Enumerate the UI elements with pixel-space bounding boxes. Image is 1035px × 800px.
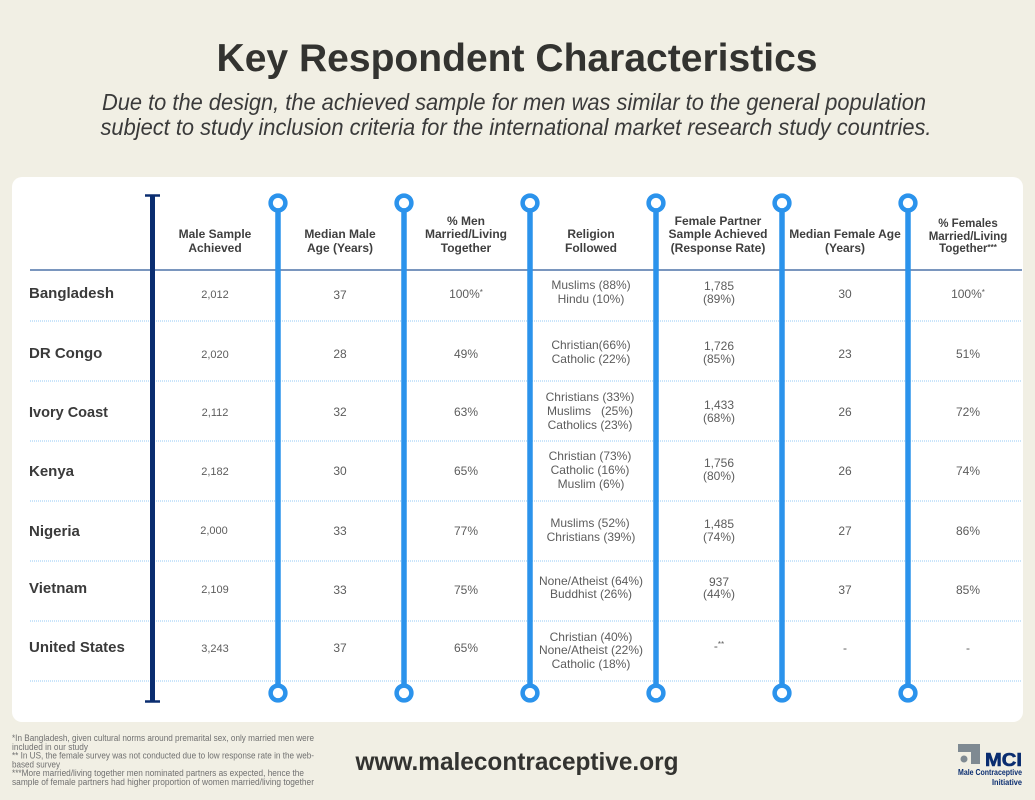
column headers: % Men: [447, 214, 485, 228]
row: Vietnam: 75%: [454, 583, 478, 597]
row: DR Congo: 2,020: [201, 349, 229, 361]
row: DR Congo: DR Congo: [29, 345, 102, 362]
row: United States: [29, 630, 970, 671]
row: Vietnam: 85%: [956, 583, 980, 597]
row: Kenya: 65%: [454, 464, 478, 478]
row: Bangladesh: 37: [333, 288, 347, 302]
row: Vietnam: [29, 574, 980, 601]
navy vertical divider: [145, 195, 160, 702]
title: Key Respondent Characteristics: [216, 37, 818, 80]
column headers: Female Partner: [675, 214, 762, 228]
column headers: Sample Achieved: [669, 227, 767, 241]
row: Ivory Coast: Catholics (23%): [548, 418, 632, 432]
footnotes: included in our study: [12, 742, 88, 752]
subtitle: subject to study inclusion criteria for the international market research study countries.: [100, 114, 932, 140]
row: Ivory Coast: [29, 390, 980, 432]
footnotes: sample of female partners had higher proportion of women married/living together: [12, 777, 314, 787]
row: Nigeria: [29, 516, 980, 544]
row: Ivory Coast: 72%: [956, 405, 980, 419]
website url: www.malecontraceptive.org: [355, 748, 678, 776]
row: Ivory Coast: Christians (33%): [546, 390, 634, 404]
row: Kenya: 30: [333, 464, 347, 478]
row: DR Congo: 49%: [454, 347, 478, 361]
row: United States: None/Atheist (22%): [539, 643, 643, 657]
row: United States: -: [843, 641, 847, 655]
row: Bangladesh: 30: [838, 287, 852, 301]
row: Kenya: (80%): [703, 469, 735, 483]
row: Ivory Coast: Muslims (25%): [547, 404, 633, 418]
icon: logo mark: [958, 744, 980, 764]
column headers: (Response Rate): [671, 241, 765, 255]
column headers: (Years): [825, 241, 865, 255]
row: Ivory Coast: (68%): [703, 411, 735, 425]
row: Nigeria: Muslims (52%): [550, 516, 630, 530]
row: DR Congo: 28: [333, 347, 347, 361]
column headers: Married/Living: [425, 227, 507, 241]
row: Kenya: [29, 449, 980, 491]
row: Kenya: Christian (73%): [549, 449, 631, 463]
row: Vietnam: None/Atheist (64%): [539, 574, 643, 588]
row: United States: United States: [29, 639, 125, 656]
column headers: Age (Years): [307, 241, 373, 255]
column headers: ***: [988, 243, 998, 252]
footnotes: ** In US, the female survey was not conducted due to low response rate in the web-: [12, 750, 314, 760]
row: Nigeria: Christians (39%): [547, 530, 635, 544]
row: Bangladesh: (89%): [703, 292, 735, 306]
row: United States: 3,243: [201, 643, 229, 655]
row: Nigeria: 77%: [454, 524, 478, 538]
row: DR Congo: 51%: [956, 347, 980, 361]
row: Bangladesh: [29, 278, 985, 306]
row: Vietnam: (44%): [703, 587, 735, 601]
row: Nigeria: 86%: [956, 524, 980, 538]
blue column dividers with circles: [271, 196, 915, 700]
row: DR Congo: Catholic (22%): [552, 352, 630, 366]
row: Ivory Coast: 1,433: [704, 398, 734, 412]
column headers: Achieved: [188, 241, 242, 255]
row: United States: 37: [333, 641, 347, 655]
row: Nigeria: Nigeria: [29, 523, 81, 540]
row: Vietnam: 33: [333, 583, 347, 597]
column headers: Religion: [567, 227, 615, 241]
row: Vietnam: Vietnam: [29, 580, 87, 597]
row: United States: -: [966, 641, 970, 655]
row: United States: Catholic (18%): [552, 657, 630, 671]
row: Kenya: 2,182: [201, 466, 229, 478]
row: United States: Christian (40%): [550, 630, 632, 644]
row: Ivory Coast: Ivory Coast: [29, 404, 108, 421]
logo: MCI: MCI: [985, 750, 1022, 770]
subtitle: [100, 89, 932, 140]
row: Nigeria: 33: [333, 524, 347, 538]
row: Bangladesh: 2,012: [201, 289, 229, 301]
row: Bangladesh: Bangladesh: [29, 285, 114, 302]
row: Nigeria: 27: [838, 524, 852, 538]
row: Kenya: 1,756: [704, 456, 734, 470]
logo: MCI: Male Contraceptive: [958, 768, 1022, 777]
logo: MCI: [958, 744, 1023, 787]
row: Vietnam: 37: [838, 583, 852, 597]
panel: table: [12, 177, 1023, 722]
row: Bangladesh: *: [480, 288, 483, 297]
row: Vietnam: 937: [709, 575, 729, 589]
column headers: Together: [939, 243, 988, 255]
row: United States: **: [718, 640, 724, 649]
column headers: Male Sample: [179, 227, 252, 241]
column headers: [179, 214, 1007, 255]
row: Bangladesh: *: [982, 288, 985, 297]
row: Nigeria: (74%): [703, 530, 735, 544]
logo: MCI: Initiative: [992, 778, 1023, 787]
row: Kenya: 74%: [956, 464, 980, 478]
row: DR Congo: Christian(66%): [551, 338, 631, 352]
column headers: Together: [441, 241, 492, 255]
row: Ivory Coast: 2,112: [202, 407, 228, 419]
row: DR Congo: (85%): [703, 352, 735, 366]
row: Kenya: 26: [838, 464, 852, 478]
row: Vietnam: 2,109: [201, 584, 229, 596]
footnotes: *In Bangladesh, given cultural norms around premarital sex, only married men were: [12, 733, 314, 743]
row: United States: -: [714, 639, 718, 653]
row: Kenya: Kenya: [29, 463, 75, 480]
row: Nigeria: 2,000: [200, 525, 228, 537]
subtitle: Due to the design, the achieved sample for men was similar to the general population: [102, 89, 926, 115]
footnotes: ***More married/living together men nominated partners as expected, hence the: [12, 768, 304, 778]
row: Bangladesh: 100%: [449, 287, 480, 301]
row: Ivory Coast: 32: [333, 405, 347, 419]
row: Ivory Coast: 63%: [454, 405, 478, 419]
row: Kenya: Muslim (6%): [558, 477, 624, 491]
column headers: % Females: [938, 218, 998, 230]
row: DR Congo: 23: [838, 347, 852, 361]
column headers: Median Male: [304, 227, 376, 241]
row: DR Congo: 1,726: [704, 339, 734, 353]
row: Bangladesh: 100%: [951, 287, 982, 301]
row divider lines: [30, 270, 1022, 681]
row: United States: 65%: [454, 641, 478, 655]
row: Nigeria: 1,485: [704, 517, 734, 531]
column headers: Median Female Age: [789, 227, 901, 241]
column headers: Married/Living: [929, 231, 1007, 243]
row: Ivory Coast: 26: [838, 405, 852, 419]
row: Bangladesh: Hindu (10%): [558, 292, 624, 306]
row: Bangladesh: 1,785: [704, 279, 734, 293]
footnotes: based survey: [12, 760, 60, 770]
row: Kenya: Catholic (16%): [551, 463, 629, 477]
row: Bangladesh: Muslims (88%): [551, 278, 631, 292]
column headers: Followed: [565, 241, 617, 255]
row: Vietnam: Buddhist (26%): [550, 587, 632, 601]
row: DR Congo: [29, 338, 980, 366]
footnotes: [12, 733, 314, 787]
